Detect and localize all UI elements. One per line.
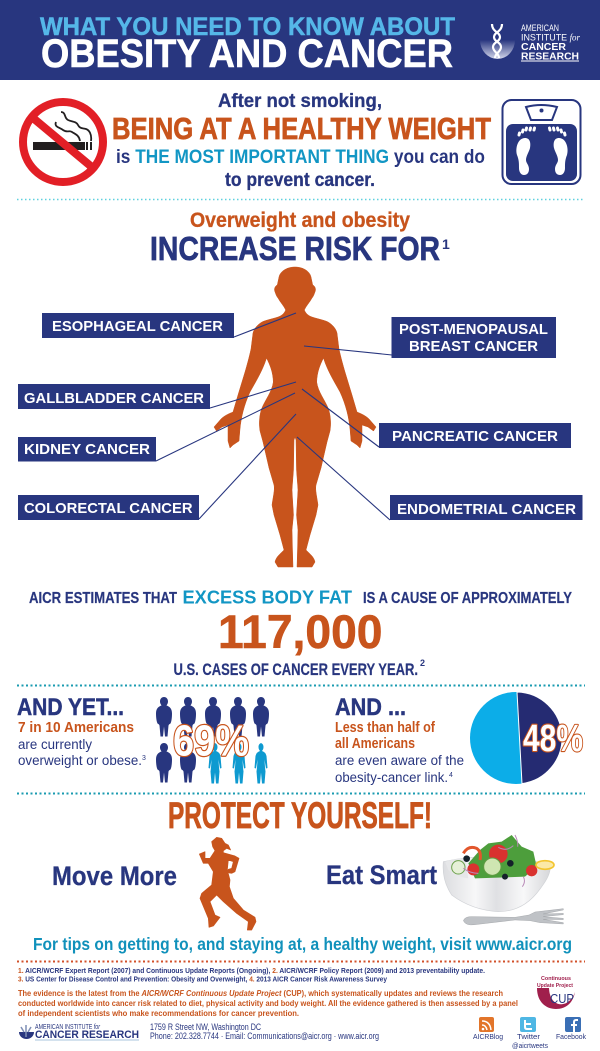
panel: and: AND ... <box>335 694 406 721</box>
label: post-menopausal breast cancer: BREAST CANCER <box>409 338 538 355</box>
panel: and: are even aware of the <box>335 753 464 768</box>
label: post-menopausal breast cancer <box>392 317 556 358</box>
contact details: Phone: 202.328.7744 · Email: Communications@aicr.org · www.aicr.org <box>150 1031 379 1041</box>
heading: increase risk: Overweight and obesity <box>190 209 410 232</box>
69 percent: 69% <box>173 716 249 766</box>
panel: and yet: AND YET... <box>17 694 124 721</box>
headline message <box>112 91 491 191</box>
label: gallbladder cancer: GALLBLADDER CANCER <box>24 390 204 407</box>
AICR logo: INSTITUTE for <box>521 32 580 42</box>
CUP badge: CUP <box>550 991 574 1006</box>
header banner <box>0 0 600 80</box>
panel: and <box>335 694 464 785</box>
CUP badge: Continuous <box>541 976 571 982</box>
panel: and: obesity-cancer link. <box>335 770 448 785</box>
evidence note: conducted worldwide into cancer risk related to diet, physical activity and body weight. All the evidence gathered is then assessed by a panel <box>18 999 518 1008</box>
contact details <box>150 1022 379 1041</box>
body silhouette <box>214 267 376 567</box>
social: twitter: Twitter <box>517 1034 541 1041</box>
pie chart: 48 percent <box>470 692 583 784</box>
label: pancreatic cancer <box>379 423 571 448</box>
48 percent: 48% <box>523 718 583 760</box>
social: twitter: @aicrtweets <box>512 1043 548 1050</box>
title line 1: WHAT YOU NEED TO KNOW ABOUT <box>40 13 455 41</box>
CUP badge: Update Project <box>537 983 573 989</box>
evidence note: The evidence is the latest from the AICR/WCRF Continuous Update Project (CUP), which systematically updates and reviews the research <box>18 989 503 998</box>
social: facebook <box>556 1017 586 1041</box>
social: facebook: Facebook <box>556 1034 586 1041</box>
evidence note <box>18 989 518 1018</box>
statistic: 117,000 cases: 2 <box>420 658 425 668</box>
move more: Move More <box>52 861 177 891</box>
social: twitter <box>512 1017 548 1050</box>
statistic: 117,000 cases: AICR ESTIMATES THAT <box>29 590 178 607</box>
label: esophageal cancer <box>42 313 234 338</box>
panel: and yet: are currently <box>18 737 92 752</box>
title line 2: OBESITY AND CANCER <box>41 32 453 76</box>
AICR logo: RESEARCH <box>521 52 579 62</box>
label: esophageal cancer: ESOPHAGEAL CANCER <box>52 318 223 335</box>
label: endometrial cancer: ENDOMETRIAL CANCER <box>397 501 576 518</box>
panel: and yet: 7 in 10 Americans <box>18 719 134 736</box>
leader lines <box>156 313 392 520</box>
statistic: 117,000 cases: EXCESS BODY FAT <box>182 586 353 608</box>
eat smart: Eat Smart <box>326 860 437 890</box>
panel: and: Less than half of <box>335 719 436 736</box>
statistic: 117,000 cases: U.S. CASES OF CANCER EVERY YEAR. <box>174 661 418 679</box>
footer logo: AMERICAN INSTITUTE for <box>35 1024 101 1031</box>
statistic: 117,000 cases: 117,000 <box>218 606 382 659</box>
label: colorectal cancer: COLORECTAL CANCER <box>24 500 193 517</box>
headline message: After not smoking, <box>218 91 382 112</box>
fork <box>463 909 563 925</box>
AICR logo: AMERICAN <box>521 23 559 33</box>
footer logo: CANCER RESEARCH <box>35 1029 139 1041</box>
references <box>18 966 485 984</box>
heading: increase risk: 1 <box>442 236 450 252</box>
evidence note: of independent scientists who make recommendations for cancer prevention. <box>18 1009 299 1018</box>
AICR logo <box>480 23 580 62</box>
heading: increase risk <box>150 209 450 267</box>
label: gallbladder cancer <box>18 384 210 409</box>
social: blog: AICRBlog <box>473 1034 503 1041</box>
panel: and yet <box>17 694 146 768</box>
icon: runner <box>199 837 256 930</box>
icon: salad bowl <box>443 835 563 925</box>
panel: and yet: overweight or obese. <box>18 753 142 768</box>
headline message: to prevent cancer. <box>225 170 375 191</box>
icon: bathroom scale <box>502 100 580 184</box>
panel: and yet: 3 <box>142 755 146 762</box>
references: 1. AICR/WCRF Expert Report (2007) and Continuous Update Reports (Ongoing), 2. AICR/WCRF Policy Report (2009) and 2013 preventability update. <box>18 966 485 975</box>
social: blog <box>473 1017 503 1041</box>
label: kidney cancer: KIDNEY CANCER <box>24 441 150 458</box>
AICR logo: CANCER <box>521 42 567 53</box>
emphasis line: BEING AT A HEALTHY WEIGHT <box>112 111 491 146</box>
statistic: 117,000 cases <box>29 586 572 679</box>
icon: no smoking <box>23 102 103 182</box>
panel: and: all Americans <box>335 735 415 752</box>
label: colorectal cancer <box>18 495 199 520</box>
panel: and: 4 <box>449 772 453 779</box>
headline message: is THE MOST IMPORTANT THING you can do <box>116 147 485 168</box>
heading: protect yourself: PROTECT YOURSELF! <box>168 795 432 836</box>
references: 3. US Center for Disease Control and Prevention: Obesity and Overweight, 4. 2013 AICR Cancer Risk Awareness Survey <box>18 974 388 984</box>
contact details: 1759 R Street NW, Washington DC <box>150 1022 261 1032</box>
footer logo <box>19 1024 139 1041</box>
pictogram: 7 in 10 people <box>156 697 269 784</box>
CUP badge <box>537 976 575 1009</box>
label: kidney cancer <box>18 437 156 462</box>
label: pancreatic cancer: PANCREATIC CANCER <box>392 428 558 445</box>
label: endometrial cancer <box>390 495 582 520</box>
label: post-menopausal breast cancer: POST-MENOPAUSAL <box>399 321 548 338</box>
heading: increase risk: INCREASE RISK FOR <box>150 230 440 267</box>
